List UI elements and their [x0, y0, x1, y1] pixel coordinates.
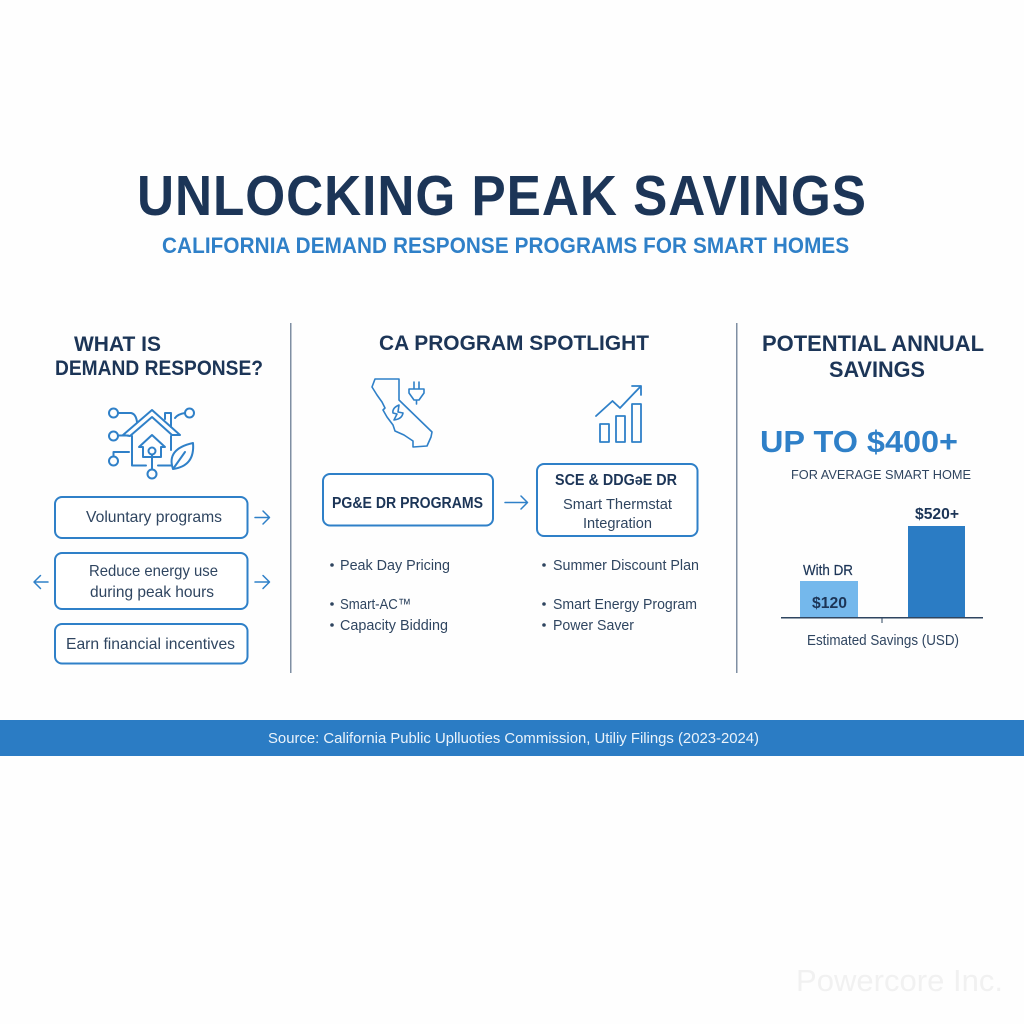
callout: reduce energy use [55, 553, 248, 609]
bar chart: With DR [803, 562, 853, 579]
icon: growth chart [596, 386, 641, 442]
bar chart: Estimated Savings (USD) [807, 633, 959, 649]
bar: 520 [908, 526, 965, 617]
callout: reduce energy use: during peak hours [90, 584, 214, 601]
big number: UP TO $400+ [760, 424, 958, 459]
panel: CA program spotlight [323, 332, 699, 634]
arrow: right 1 [255, 511, 270, 524]
list: PG&E programs: Capacity Bidding [340, 617, 448, 634]
list: SCE and SDG&E programs: Summer Discount Plan [553, 557, 699, 574]
footer band [0, 720, 1024, 756]
box: SCE and SDG&E: Smart Thermstat [563, 496, 673, 513]
heading: potential annual savings: SAVINGS [829, 357, 925, 382]
heading: what is demand response: DEMAND RESPONSE? [55, 357, 263, 380]
panel: what is demand response [34, 333, 270, 664]
callout: earn financial incentives [55, 624, 248, 664]
panel: potential annual savings [760, 331, 984, 649]
box: PG&E DR programs [323, 474, 493, 526]
bar chart [781, 506, 983, 649]
watermark: Powercore Inc. [796, 963, 1003, 998]
list: PG&E programs: Smart-AC™ [340, 596, 411, 613]
icon: California with plug [372, 379, 432, 447]
arrow: left [34, 576, 48, 588]
heading: what is demand response [55, 333, 263, 380]
heading: CA program spotlight: CA PROGRAM SPOTLIGHT [379, 332, 649, 355]
bar chart: $120 [812, 595, 847, 612]
footer band: Source: California Public Uplluoties Commission, Utiliy Filings (2023-2024) [268, 730, 759, 747]
heading: potential annual savings: POTENTIAL ANNUAL [762, 331, 984, 356]
bar: with DR [800, 581, 858, 617]
heading: what is demand response: WHAT IS [74, 333, 161, 356]
icon: smart home [109, 408, 194, 478]
callout: earn financial incentives: Earn financial incentives [66, 636, 235, 653]
box: SCE and SDG&E [537, 464, 698, 536]
heading: potential annual savings [762, 331, 984, 382]
bar chart: $520+ [915, 506, 959, 523]
box: SCE and SDG&E: Integration [583, 515, 652, 532]
list: PG&E programs [330, 557, 450, 634]
caption: FOR AVERAGE SMART HOME [791, 467, 971, 482]
list: SCE and SDG&E programs [542, 557, 699, 634]
box: SCE and SDG&E: SCE & DDGəE DR [555, 472, 677, 489]
callout: reduce energy use: Reduce energy use [89, 563, 218, 580]
list: SCE and SDG&E programs: Power Saver [553, 617, 634, 634]
callout: voluntary programs [55, 497, 248, 538]
list: SCE and SDG&E programs: Smart Energy Program [553, 596, 697, 613]
callout: voluntary programs: Voluntary programs [86, 509, 222, 526]
title: UNLOCKING PEAK SAVINGS [137, 165, 866, 228]
box: PG&E DR programs: PG&E DR PROGRAMS [332, 495, 483, 512]
list: PG&E programs: Peak Day Pricing [340, 557, 450, 574]
arrow: PG&E to SCE [505, 496, 528, 509]
subtitle: CALIFORNIA DEMAND RESPONSE PROGRAMS FOR SMART HOMES [162, 233, 849, 258]
arrow: right 2 [255, 576, 270, 588]
